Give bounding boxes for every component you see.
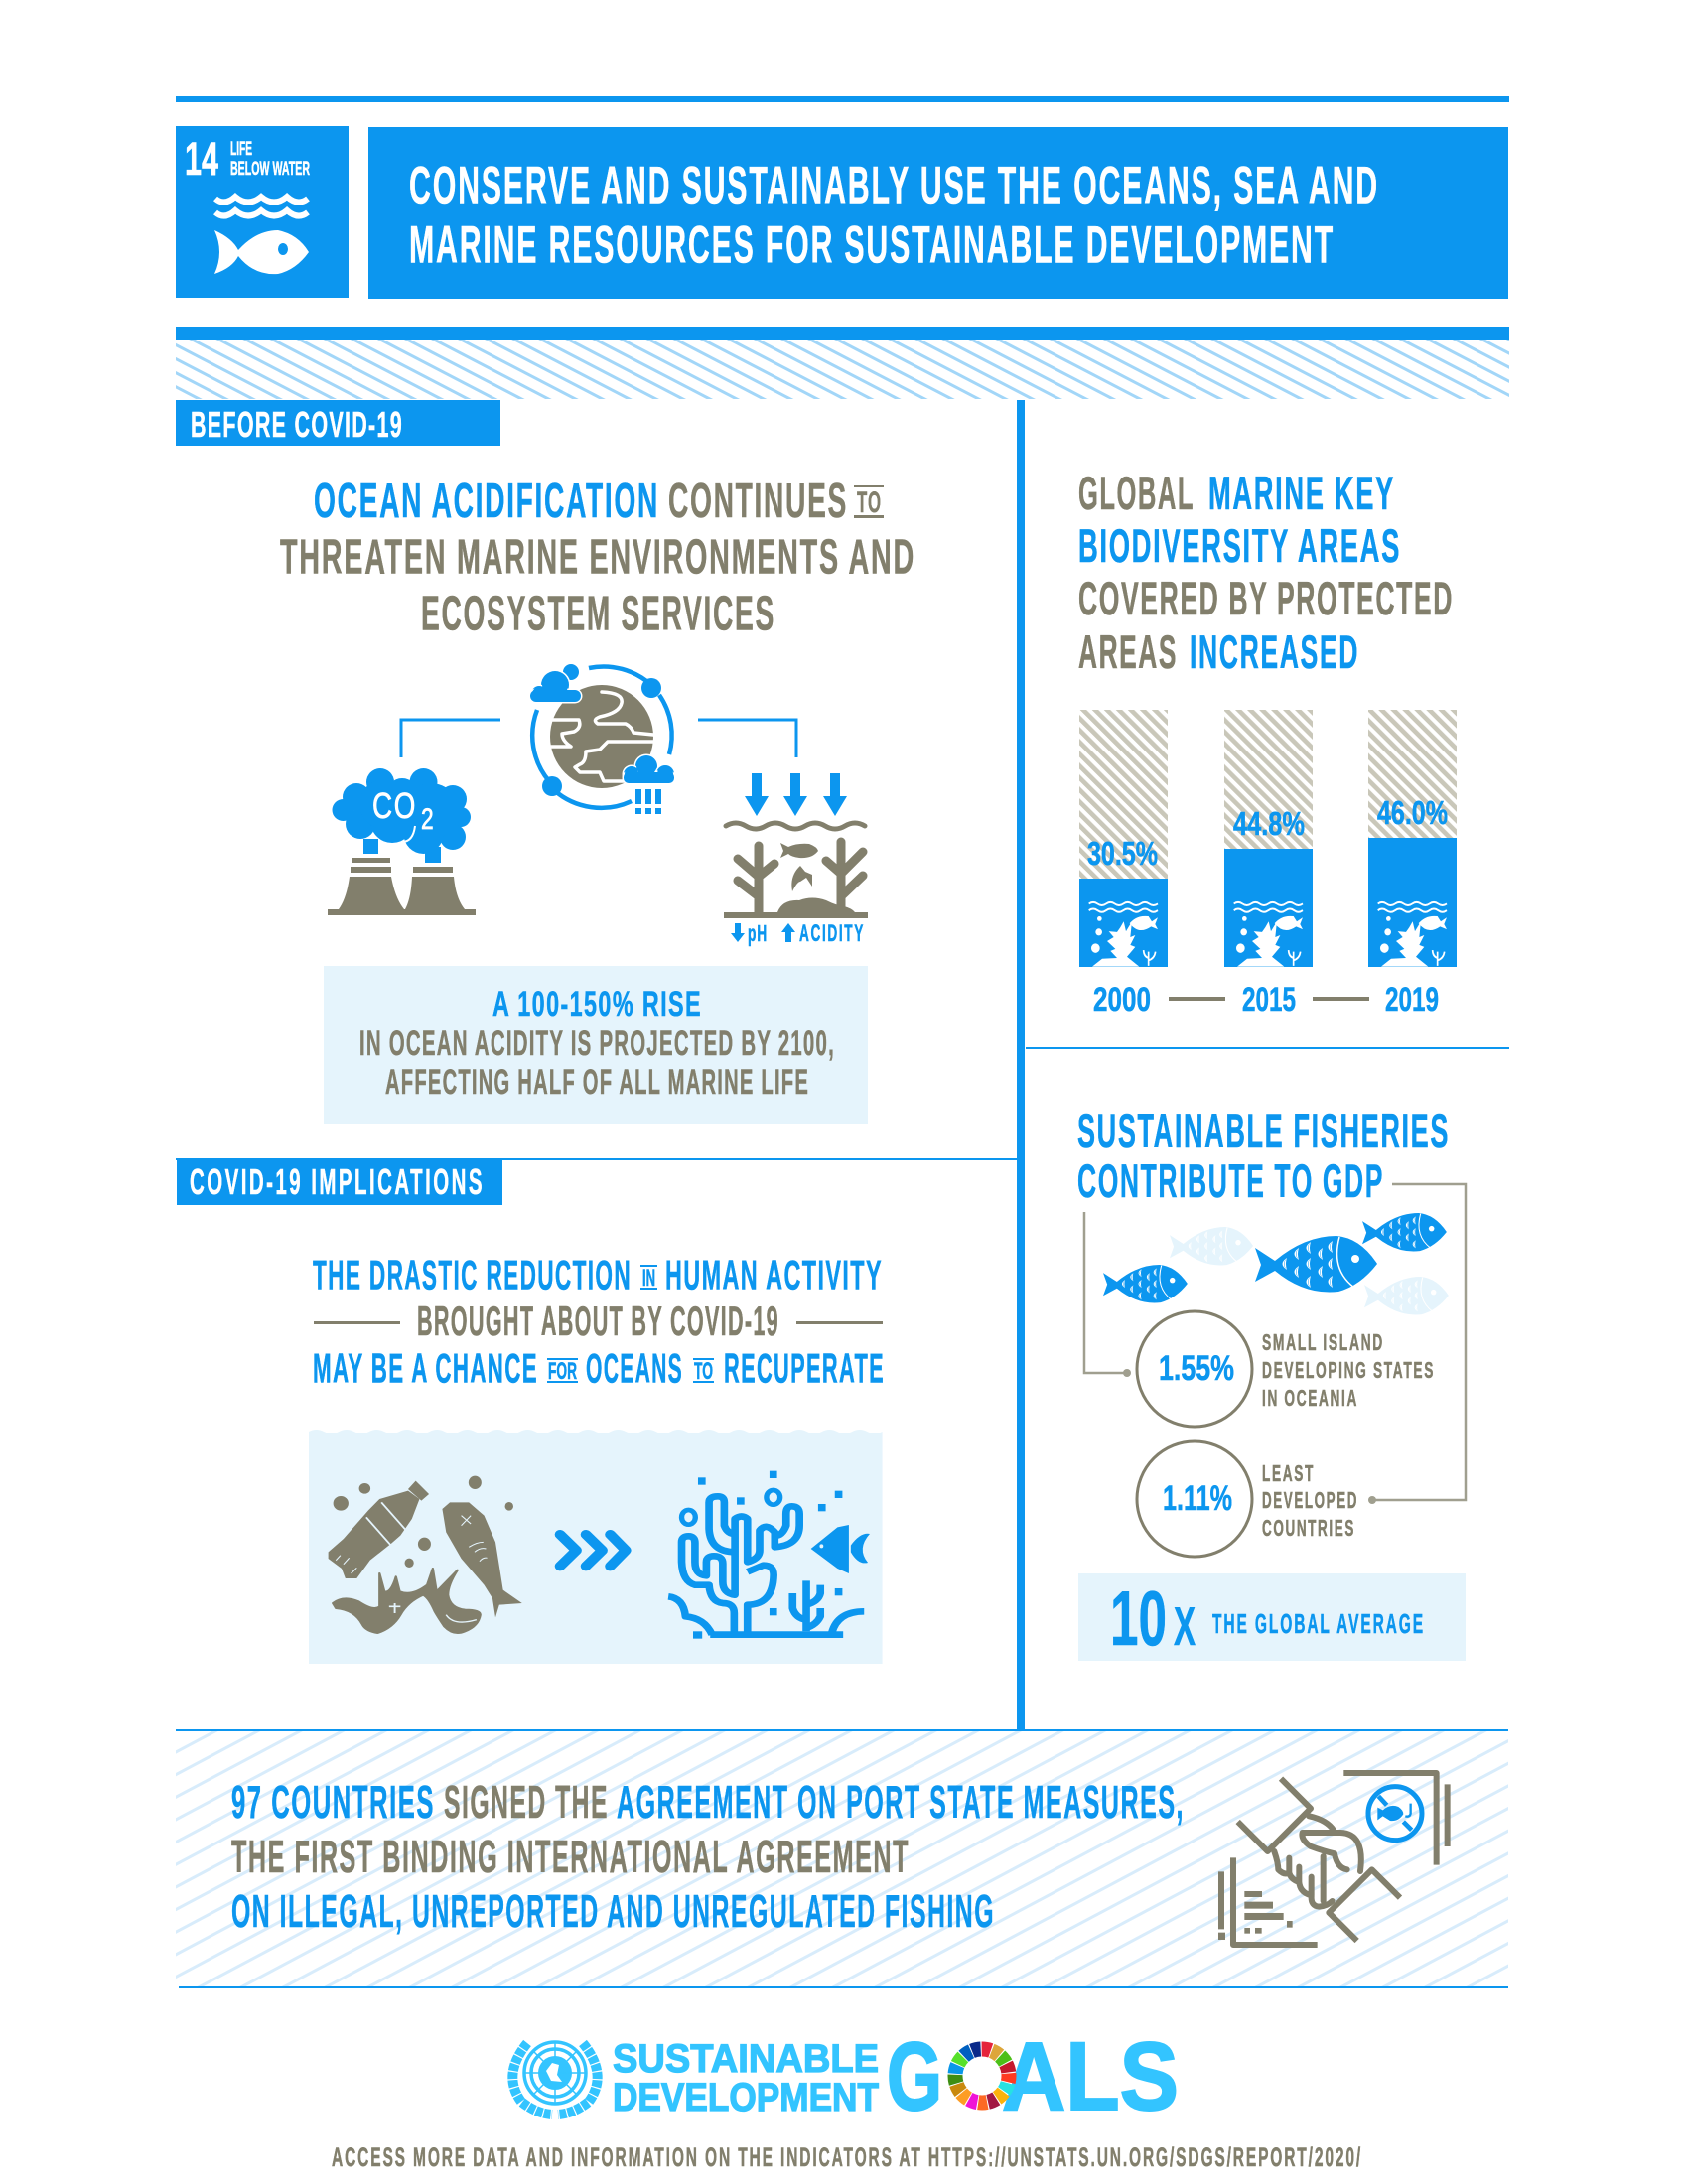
panel: ocean recovery illustration	[309, 1430, 883, 1664]
icon: healthy coral and fish	[668, 1471, 870, 1639]
divider: right column	[1026, 1047, 1509, 1049]
tag: before covid-19: BEFORE COVID-19	[191, 404, 403, 445]
top rule	[176, 96, 1509, 102]
icon: acidifying sea	[724, 773, 868, 918]
title banner	[368, 127, 1508, 299]
heading: ocean acidification: ECOSYSTEM SERVICES	[421, 588, 775, 641]
stat: 1.55% oceania	[1137, 1311, 1435, 1427]
legend: pH and acidity	[731, 920, 865, 947]
text: agreement on port state measures: THE FIRST BINDING INTERNATIONAL AGREEMENT	[231, 1831, 910, 1882]
heading: marine key biodiversity areas	[1078, 467, 1454, 678]
stat: 1.11% least developed countries: DEVELOPED	[1262, 1487, 1358, 1513]
bar: 2000	[1079, 710, 1168, 967]
heading: sustainable fisheries: CONTRIBUTE TO GDP	[1077, 1155, 1384, 1207]
icon: polluted ocean	[329, 1476, 522, 1633]
heading: ocean acidification	[280, 475, 915, 641]
callout: ocean acidity projection: A 100-150% RISE	[492, 985, 702, 1024]
stat: 1.11% least developed countries: 1.11%	[1163, 1479, 1232, 1518]
icon: power plant with CO2 clouds: CO	[372, 785, 417, 826]
axis years: 2015	[1242, 981, 1296, 1019]
connector: oceania	[1084, 1212, 1131, 1377]
SDG 14 badge	[176, 126, 349, 298]
hatched divider band	[176, 327, 1509, 399]
heading: ocean acidification: THREATEN MARINE ENVIRONMENTS AND	[280, 530, 915, 584]
heading: marine key biodiversity areas: AREAS	[1078, 625, 1178, 678]
axis years: 2019	[1385, 981, 1439, 1019]
heading: reduction in human activity: HUMAN ACTIVITY	[665, 1251, 883, 1298]
text: agreement on port state measures	[231, 1776, 1185, 1937]
text: agreement on port state measures: 97 COUNTRIES	[231, 1776, 435, 1828]
heading: reduction in human activity: MAY BE A CHANCE	[313, 1344, 538, 1392]
callout: ocean acidity projection	[324, 966, 868, 1124]
callout: ocean acidity projection: AFFECTING HALF OF ALL MARINE LIFE	[385, 1063, 809, 1102]
callout: 10x the global average: X	[1174, 1595, 1196, 1657]
callout: 10x the global average	[1078, 1573, 1466, 1662]
connector: globe to sea	[698, 720, 796, 757]
stat: 1.55% oceania: SMALL ISLAND	[1262, 1329, 1384, 1355]
heading: reduction in human activity: RECUPERATE	[724, 1344, 885, 1392]
axis years	[1093, 981, 1439, 1019]
stat: 1.55% oceania: 1.55%	[1159, 1349, 1234, 1388]
heading: reduction in human activity: IN	[642, 1265, 655, 1292]
heading: reduction in human activity: THE DRASTIC REDUCTION	[313, 1251, 632, 1298]
stat: 1.55% oceania: DEVELOPING STATES	[1262, 1357, 1435, 1383]
callout: 10x the global average: 10	[1110, 1574, 1167, 1662]
tag: covid-19 implications	[177, 1160, 502, 1205]
bar: 2000: 30.5%	[1087, 835, 1158, 872]
connector: factory to globe	[401, 720, 500, 757]
legend: pH and acidity: ACIDITY	[799, 920, 865, 947]
heading: sustainable fisheries	[1077, 1104, 1450, 1207]
logo: sustainable development wordmark: SUSTAINABLE	[613, 2037, 879, 2081]
heading: marine key biodiversity areas: GLOBAL	[1078, 467, 1195, 519]
heading: ocean acidification: TO	[857, 486, 882, 519]
column divider	[1017, 400, 1025, 1729]
text: agreement on port state measures: SIGNED THE	[444, 1776, 609, 1828]
callout: 10x the global average: THE GLOBAL AVERAGE	[1212, 1608, 1425, 1639]
heading: reduction in human activity: OCEANS	[586, 1344, 683, 1392]
heading: ocean acidification: CONTINUES	[668, 475, 848, 528]
panel: port state measures	[176, 1729, 1508, 1988]
heading: marine key biodiversity areas: INCREASED	[1190, 625, 1359, 678]
arrow: improvement chevrons	[560, 1535, 626, 1567]
icon: power plant with CO2 clouds: 2	[421, 803, 435, 836]
stat: 1.11% least developed countries: COUNTRIES	[1262, 1515, 1355, 1541]
heading: reduction in human activity: BROUGHT ABOUT BY COVID-19	[417, 1297, 779, 1344]
bar chart: protected areas coverage	[1079, 710, 1457, 1019]
text: agreement on port state measures: ON ILLEGAL, UNREPORTED AND UNREGULATED FISHING	[231, 1885, 995, 1937]
heading: reduction in human activity: FOR	[548, 1358, 577, 1385]
heading: reduction in human activity: TO	[694, 1358, 713, 1385]
connector: least developed	[1368, 1184, 1466, 1504]
SDG 14 badge: LIFE	[230, 139, 252, 160]
icon: handshake agreement	[1218, 1773, 1448, 1945]
logo: goals with SDG wheel: ALS	[1002, 2022, 1179, 2130]
logo: sustainable development wordmark: DEVELOPMENT	[613, 2076, 879, 2119]
logo: UN emblem	[512, 2042, 598, 2115]
SDG 14 badge: BELOW WATER	[230, 159, 310, 180]
bar: 2019	[1368, 710, 1457, 967]
stat: 1.11% least developed countries	[1137, 1441, 1358, 1557]
bar: 2015: 44.8%	[1233, 805, 1305, 842]
heading: marine key biodiversity areas: BIODIVERSITY AREAS	[1078, 519, 1401, 572]
logo: goals with SDG wheel: G	[887, 2022, 942, 2130]
axis years: 2000	[1093, 981, 1151, 1019]
bar: 2019: 46.0%	[1377, 794, 1448, 831]
icon: school of fish	[1103, 1213, 1449, 1314]
logo: sustainable development wordmark	[613, 2037, 879, 2119]
tag: covid-19 implications: COVID-19 IMPLICATIONS	[190, 1161, 485, 1202]
divider: left column	[176, 1158, 1020, 1160]
heading: reduction in human activity	[313, 1251, 885, 1392]
stat: 1.55% oceania: IN OCEANIA	[1262, 1385, 1358, 1411]
heading: marine key biodiversity areas: MARINE KEY	[1208, 467, 1395, 519]
stat: 1.11% least developed countries: LEAST	[1262, 1460, 1315, 1486]
bar: 2015	[1224, 710, 1313, 967]
callout: ocean acidity projection: IN OCEAN ACIDITY IS PROJECTED BY 2100,	[359, 1024, 835, 1063]
legend: pH and acidity: pH	[748, 920, 768, 946]
logo: goals with SDG wheel	[887, 2022, 1179, 2130]
heading: ocean acidification: OCEAN ACIDIFICATION	[314, 475, 659, 528]
icon: globe with clouds	[530, 664, 674, 814]
SDG 14 badge: 14	[185, 132, 218, 185]
icon: power plant with CO2 clouds	[328, 768, 476, 915]
text: agreement on port state measures: AGREEMENT ON PORT STATE MEASURES,	[617, 1776, 1185, 1828]
